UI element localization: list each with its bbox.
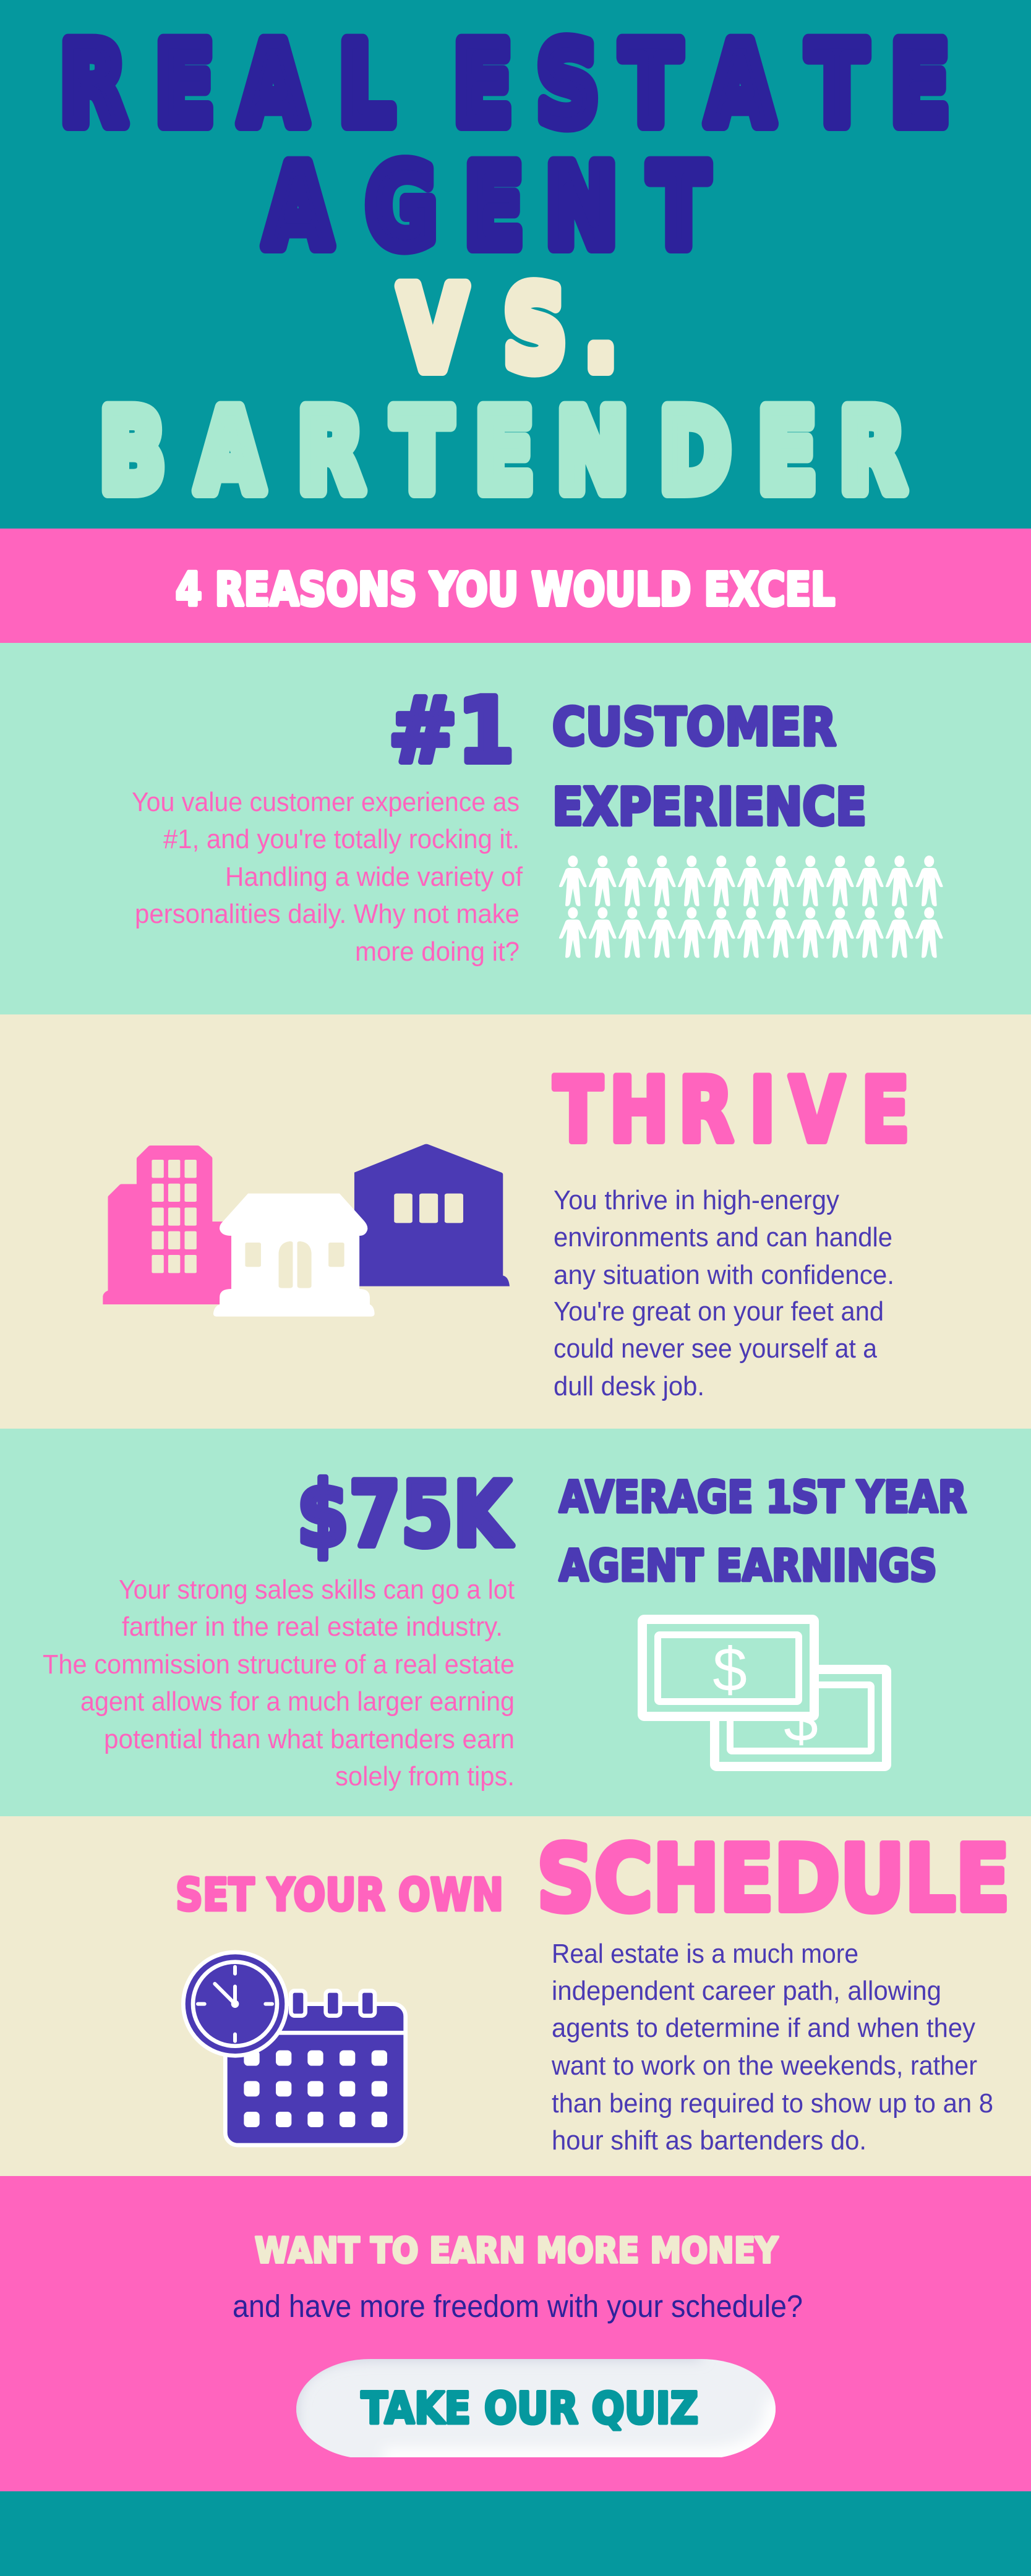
body text: earnings: potential than what bartenders earn [104, 1724, 515, 1754]
icon: front bill [642, 1620, 814, 1716]
body text: earnings: agent allows for a much larger earning [80, 1686, 515, 1717]
heading: average earnings [559, 1472, 967, 1591]
body text: thrive: any situation with confidence. [554, 1260, 894, 1290]
body text: earnings [43, 1575, 515, 1792]
panel: title background [0, 0, 1031, 529]
body text: thrive: environments and can handle [554, 1222, 892, 1252]
panel: thrive [0, 1014, 1031, 1429]
body text: thrive: could never see yourself at a [554, 1333, 877, 1364]
icon: white bank [213, 1194, 375, 1317]
subtitle: 4 REASONS YOU WOULD EXCEL [176, 563, 835, 616]
body text: earnings: solely from tips. [335, 1761, 515, 1792]
heading: set your own: SET YOUR OWN [176, 1869, 503, 1921]
icon: front bill: $ [712, 1635, 747, 1704]
number: $75K: $75K [297, 1463, 513, 1567]
body text: schedule: independent career path, allowing [552, 1976, 941, 2006]
panel: schedule [0, 1816, 1031, 2176]
body text: schedule: hour shift as bartenders do. [552, 2125, 866, 2156]
body text: earnings: farther in the real estate industry. [122, 1612, 503, 1642]
icon: back bill: $ [784, 1685, 818, 1754]
icon: back bill [715, 1669, 887, 1767]
body text: customer experience: more doing it? [355, 937, 520, 967]
button: take our quiz [296, 2359, 776, 2457]
body text: schedule [551, 1939, 993, 2156]
heading: average earnings: AGENT EARNINGS [559, 1541, 937, 1591]
subheading: and have more freedom with your schedule? [233, 2289, 803, 2324]
panel: earnings [0, 1429, 1031, 1816]
body text: schedule: Real estate is a much more [552, 1939, 858, 1969]
icon: purple house [346, 1144, 510, 1286]
heading: customer experience [552, 697, 866, 837]
body text: earnings: The commission structure of a real estate [43, 1649, 515, 1680]
title: vs.: VS. [400, 264, 617, 396]
body text: customer experience: You value customer experience as [132, 787, 520, 817]
button: take our quiz: TAKE OUR QUIZ [361, 2383, 698, 2434]
body text: schedule: agents to determine if and when they [552, 2013, 975, 2043]
icon: dollar bills [642, 1620, 887, 1767]
body text: schedule: than being required to show up to an 8 [552, 2088, 993, 2119]
body text: customer experience: #1, and you're totally rocking it. [163, 824, 520, 854]
icon: crowd of people [559, 856, 943, 958]
heading: customer experience: CUSTOMER [552, 697, 836, 757]
body text: thrive: You're great on your feet and [554, 1296, 884, 1327]
body text: customer experience: personalities daily. Why not make [135, 899, 520, 929]
panel: customer experience [0, 643, 1031, 1014]
body text: customer experience [132, 787, 523, 967]
heading: thrive: THRIVE [554, 1058, 910, 1162]
title: real estate: REAL ESTATE [60, 19, 949, 151]
panel: footer band [0, 2491, 1031, 2576]
title: agent: AGENT [265, 142, 708, 273]
icon: calendar [225, 1991, 406, 2145]
icon: buildings [103, 1144, 510, 1317]
heading: average earnings: AVERAGE 1ST YEAR [559, 1472, 967, 1523]
panel: call to action [0, 2176, 1031, 2491]
heading: want to earn more money: WANT TO EARN MORE MONEY [255, 2230, 779, 2271]
number: #1: #1 [388, 679, 515, 783]
panel: subtitle band [0, 529, 1031, 643]
body text: thrive: You thrive in high-energy [554, 1185, 839, 1215]
body text: thrive [554, 1185, 894, 1401]
body text: customer experience: Handling a wide variety of [225, 862, 523, 892]
title: bartender: BARTENDER [100, 386, 905, 518]
icon: pink tower [103, 1146, 239, 1304]
body text: earnings: Your strong sales skills can go a lot [119, 1575, 515, 1605]
body text: schedule: want to work on the weekends, rather [551, 2051, 977, 2081]
heading: customer experience: EXPERIENCE [552, 776, 866, 837]
body text: thrive: dull desk job. [554, 1371, 704, 1401]
icon: calendar and clock [183, 1952, 406, 2145]
icon: clock [183, 1952, 287, 2055]
